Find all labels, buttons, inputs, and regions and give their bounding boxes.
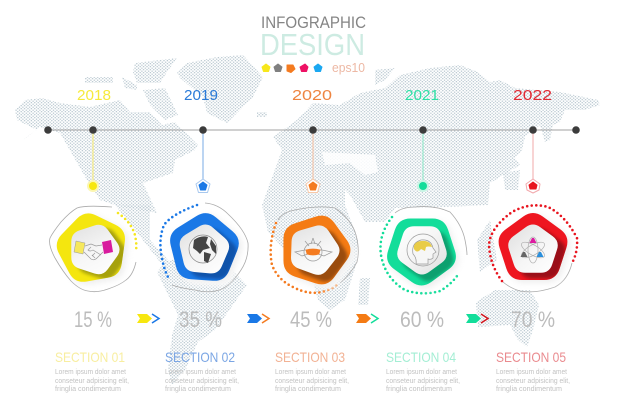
badge 5: red atom	[489, 205, 577, 292]
section 5 text: conseteur adpisicing elit,	[496, 376, 570, 385]
icon: globe	[189, 235, 217, 263]
section 4 text: SECTION 04	[386, 349, 456, 365]
badge 4: green brain	[380, 207, 467, 293]
section 5 text: fringlia condimentum	[496, 384, 562, 393]
section 1 text: SECTION 01	[55, 349, 125, 365]
section 2 text: fringlia condimentum	[165, 384, 231, 393]
icon: head with brain	[407, 234, 439, 266]
year labels	[77, 87, 552, 104]
section 4 text: fringlia condimentum	[386, 384, 452, 393]
badge 1: yellow handshake	[50, 206, 136, 292]
arrow 3	[356, 314, 378, 323]
section 1 text	[55, 349, 129, 393]
section 5 text: Lorem ipsum dolor amet	[496, 367, 568, 376]
percentages: 15 %	[74, 307, 112, 332]
seas cut from map	[322, 152, 378, 175]
percentages: 35 %	[179, 307, 222, 332]
icon: atom flasks	[519, 237, 547, 263]
title	[260, 13, 366, 75]
section 1 text: Lorem ipsum dolor amet	[55, 367, 127, 376]
heading: infographic: INFOGRAPHIC	[261, 13, 366, 32]
section 3 text: conseteur adpisicing elit,	[275, 376, 349, 385]
section 4 text: Lorem ipsum dolor amet	[386, 367, 458, 376]
section 3 text: SECTION 03	[275, 349, 345, 365]
section 3 text	[275, 349, 349, 393]
percentages: 45 %	[290, 307, 332, 332]
section 5 text	[496, 349, 570, 393]
timeline nodes	[44, 126, 580, 134]
year labels: 2021	[405, 87, 439, 104]
section 2 text	[165, 349, 239, 393]
section 2 text: conseteur adpisicing elit,	[165, 376, 239, 385]
percentages	[74, 307, 555, 332]
section 3 text: Lorem ipsum dolor amet	[275, 367, 347, 376]
badge 2: blue globe	[160, 203, 248, 292]
section 3 text: fringlia condimentum	[275, 384, 341, 393]
section 1 text: conseteur adpisicing elit,	[55, 376, 129, 385]
section 4 text	[386, 349, 460, 393]
legend pentagons	[262, 64, 322, 72]
timeline	[44, 126, 580, 193]
section 1 text: fringlia condimentum	[55, 384, 121, 393]
year labels: 2022	[513, 87, 552, 104]
section 5 text: SECTION 05	[496, 349, 566, 365]
icon: handshake	[74, 240, 113, 260]
year labels: 2020	[292, 87, 332, 104]
percentages: 60 %	[400, 307, 444, 332]
percentages: 70 %	[511, 307, 555, 332]
section 2 text: SECTION 02	[165, 349, 235, 365]
heading: design: DESIGN	[260, 27, 365, 62]
section 4 text: conseteur adpisicing elit,	[386, 376, 460, 385]
icon: plane	[295, 238, 332, 261]
section 2 text: Lorem ipsum dolor amet	[165, 367, 237, 376]
stems	[93, 130, 533, 186]
year labels: 2018	[77, 87, 111, 104]
stem markers	[87, 179, 540, 193]
eps10 label: eps10	[332, 60, 365, 75]
arrow 4	[466, 314, 488, 323]
arrow 1	[137, 314, 159, 323]
dotted world map	[15, 55, 600, 385]
arrow 2	[247, 314, 269, 323]
year labels: 2019	[184, 87, 218, 104]
badge 3: orange plane	[271, 206, 364, 296]
